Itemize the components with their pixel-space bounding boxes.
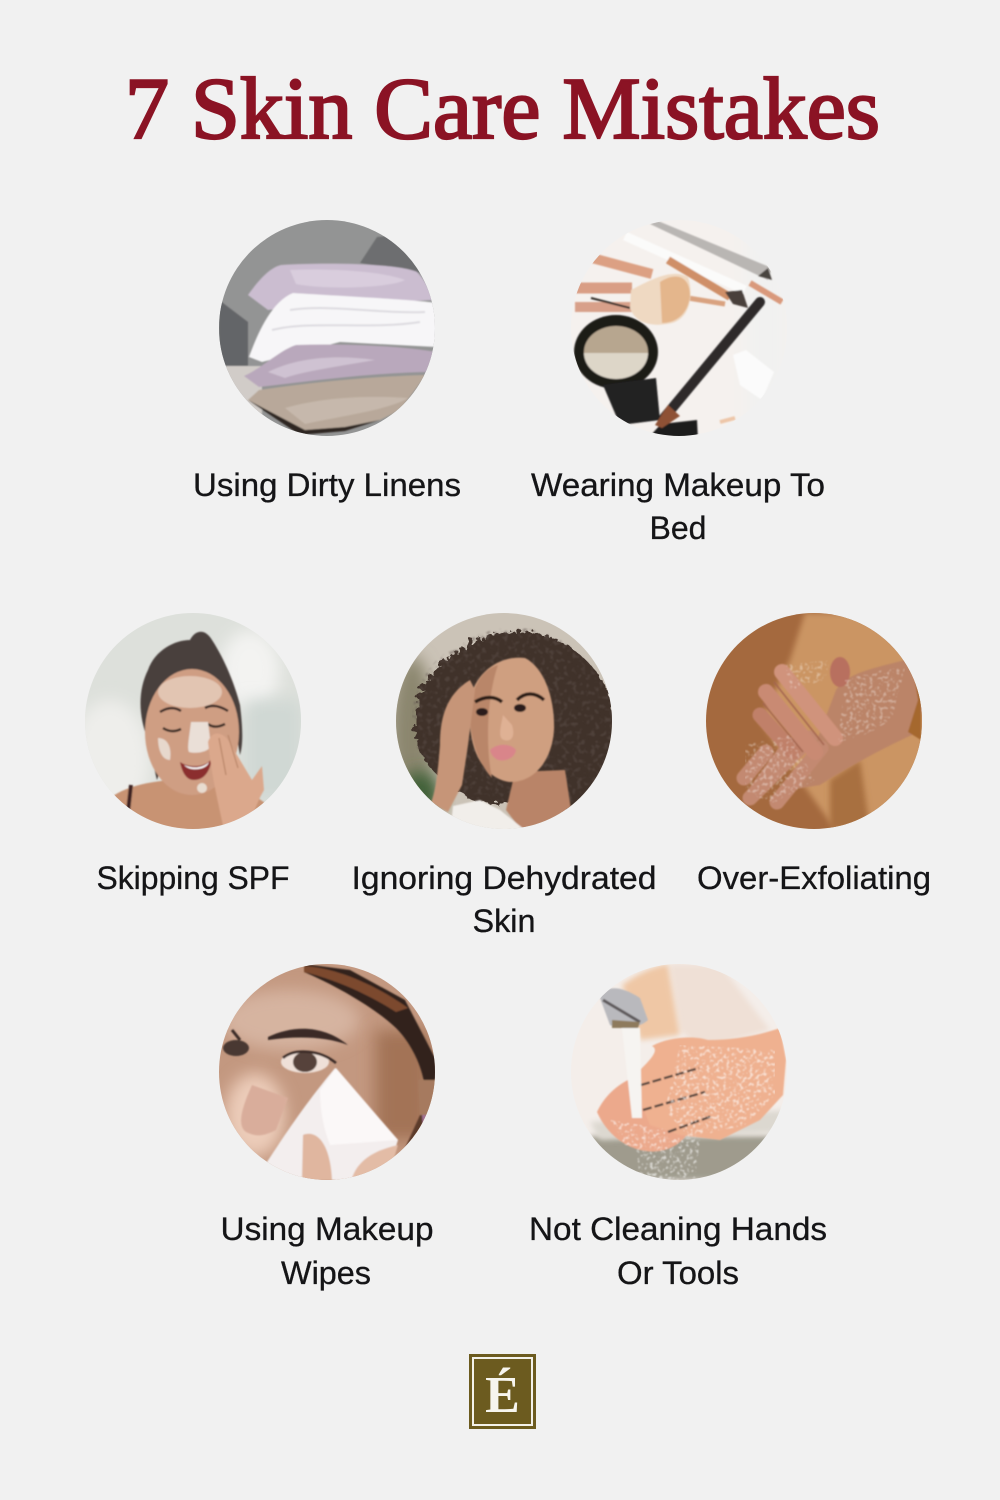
photo: woman applying cream [70, 613, 301, 835]
photo: woman using wipe [219, 964, 436, 1180]
label: Skipping SPF [96, 860, 290, 896]
arm [790, 660, 925, 790]
upper fingers [782, 672, 835, 738]
item: Ignoring Dehydrated Skin: Skin [472, 903, 536, 939]
item: Using Makeup Wipes: Wipes [281, 1255, 371, 1291]
photo: woman with curly hair [390, 613, 614, 835]
soap foam [610, 1045, 775, 1180]
label: Over-Exfoliating [697, 860, 931, 896]
logo [469, 1354, 536, 1429]
photo: stacked pillows [219, 220, 436, 436]
item: Ignoring Dehydrated Skin [352, 613, 656, 939]
photo: hands with scrub [706, 613, 925, 829]
logo: É [485, 1366, 520, 1424]
label: Using Makeup [220, 1211, 434, 1247]
hair [412, 628, 614, 808]
item: Not Cleaning Hands Or Tools: Or Tools [617, 1255, 739, 1291]
label: Using Dirty Linens [193, 467, 461, 503]
item: Skipping SPF [70, 613, 301, 896]
item: Using Makeup Wipes [219, 964, 436, 1291]
lower hand [597, 1080, 690, 1152]
upper hand and arm [640, 1028, 786, 1140]
photo: washing hands under faucet [571, 964, 790, 1180]
title: 7 Skin Care Mistakes [125, 61, 880, 158]
label: Not Cleaning Hands [529, 1211, 827, 1247]
item: Using Dirty Linens [193, 220, 461, 503]
item: Wearing Makeup To Bed [531, 220, 825, 546]
lower fingers [744, 738, 821, 802]
label: Ignoring Dehydrated [352, 860, 656, 896]
scrub grains [745, 660, 905, 805]
item: Not Cleaning Hands Or Tools [529, 964, 827, 1291]
photo: makeup and brushes [571, 220, 787, 440]
item: Wearing Makeup To Bed: Bed [650, 510, 706, 546]
item: Over-Exfoliating [697, 613, 931, 896]
label: Wearing Makeup To [531, 467, 825, 503]
